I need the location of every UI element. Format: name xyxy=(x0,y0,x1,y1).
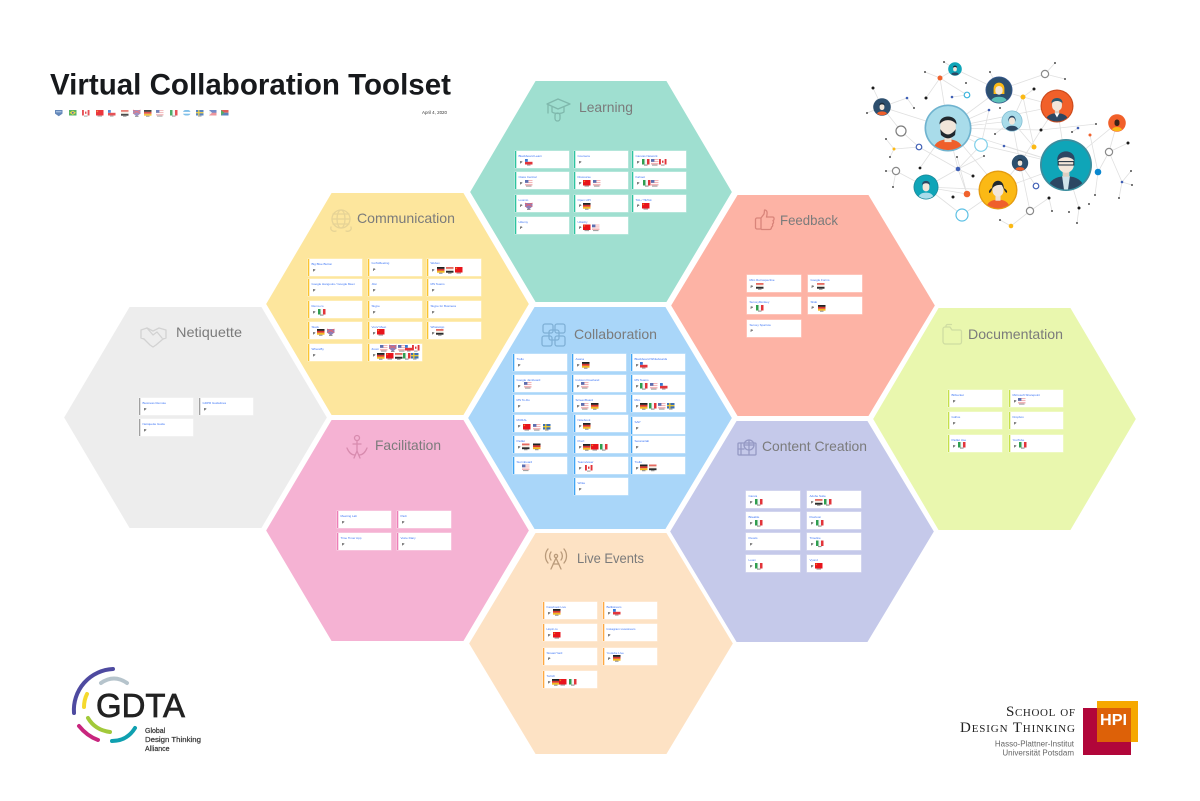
card: P xyxy=(548,634,551,638)
avatar: man with glasses xyxy=(1040,139,1092,191)
card: P xyxy=(373,332,376,336)
card: Slido xyxy=(810,300,818,304)
card: TAL / TikTok xyxy=(636,198,652,202)
card: Business Remote xyxy=(142,401,166,405)
card: P xyxy=(750,564,753,568)
card: P xyxy=(313,268,316,272)
card xyxy=(368,259,422,276)
card: P xyxy=(313,310,316,314)
card xyxy=(603,624,657,641)
logo squares xyxy=(1083,701,1138,755)
card: Notebook xyxy=(578,418,591,422)
heading: Learning xyxy=(579,99,633,115)
institute name xyxy=(995,740,1075,758)
card: Canvas Network xyxy=(636,154,658,158)
card xyxy=(427,279,481,296)
card: P xyxy=(636,466,639,470)
card: P xyxy=(342,520,345,524)
panel: learning xyxy=(469,80,733,303)
card: P xyxy=(636,426,639,430)
card: P xyxy=(204,408,207,412)
card xyxy=(808,297,862,314)
card: Hopin.to xyxy=(546,627,558,631)
card: Gdrive xyxy=(952,415,961,419)
card xyxy=(427,322,481,339)
card: P xyxy=(953,444,956,448)
card: P xyxy=(373,268,376,272)
card: P xyxy=(402,520,405,524)
card: Microsoft Sharepoint xyxy=(1012,393,1040,397)
panel: collaboration xyxy=(467,306,733,530)
icon: globe with people xyxy=(331,210,351,231)
card xyxy=(308,259,362,276)
card xyxy=(337,511,391,528)
card: SAP xyxy=(634,420,641,424)
card: P xyxy=(579,466,582,470)
panel: facilitation xyxy=(265,419,530,642)
logo wordmark: GDTA xyxy=(96,687,185,724)
card: P xyxy=(608,612,611,616)
icon: folder xyxy=(943,324,962,344)
card: P xyxy=(548,657,551,661)
card xyxy=(631,436,685,453)
card: Survey Sparrow xyxy=(750,323,772,327)
icon: graduation cap xyxy=(547,99,570,121)
card: Time Timer App xyxy=(340,536,362,540)
card xyxy=(513,436,567,453)
card xyxy=(631,417,685,434)
card: P xyxy=(812,306,814,310)
card: Skype xyxy=(372,304,380,308)
logo subtitle: Design Thinking xyxy=(145,737,201,744)
card xyxy=(368,344,422,361)
card: Skype for Business xyxy=(430,304,457,308)
card xyxy=(747,297,801,314)
card: Loom xyxy=(748,558,757,562)
card: P xyxy=(144,408,147,412)
card xyxy=(632,172,686,189)
card: Miro Retrospective xyxy=(750,278,775,282)
card xyxy=(807,491,861,508)
card: Facebook Live xyxy=(546,605,566,609)
card xyxy=(543,671,597,688)
card: Padi xyxy=(400,514,407,518)
card: P xyxy=(637,182,640,186)
card: Meeting Lab xyxy=(340,514,357,518)
card: P xyxy=(313,288,316,292)
card: Bellistream xyxy=(606,605,622,609)
network lines xyxy=(867,62,1132,226)
card xyxy=(368,322,422,339)
card xyxy=(632,195,686,212)
card xyxy=(948,390,1002,407)
card: P xyxy=(520,204,523,208)
card: P xyxy=(637,160,640,164)
card: Blackboard Whiteboards xyxy=(634,357,668,361)
card: P xyxy=(432,268,435,272)
card: P xyxy=(636,364,639,368)
card: Big Blue Button xyxy=(312,262,333,266)
card: P xyxy=(579,488,582,492)
avatar: man orange xyxy=(1040,90,1074,122)
card xyxy=(574,415,628,432)
card: P xyxy=(1014,422,1017,426)
card xyxy=(572,354,626,371)
avatar: bearded man xyxy=(924,104,972,152)
icon: thumbs up xyxy=(756,210,774,230)
card: P xyxy=(577,384,580,388)
card xyxy=(513,354,567,371)
icon: facilitator xyxy=(347,436,367,458)
card xyxy=(572,395,626,412)
logo subtitle: Alliance xyxy=(145,746,170,753)
card: P xyxy=(520,160,523,164)
card: Canva xyxy=(748,494,758,498)
card: Google Hangouts / Google Meet xyxy=(312,282,355,286)
card: P xyxy=(750,306,754,310)
card: Google Forms xyxy=(810,278,830,282)
card xyxy=(513,415,567,432)
card xyxy=(574,172,628,189)
card xyxy=(574,478,628,495)
card xyxy=(948,412,1002,429)
card: Pexels xyxy=(748,536,758,540)
card: Coursera xyxy=(578,154,590,158)
panel: communication xyxy=(265,192,530,416)
heading: Live Events xyxy=(577,550,644,566)
heading: Netiquette xyxy=(176,324,242,340)
card xyxy=(807,533,861,550)
card: P xyxy=(518,424,521,428)
card: Discourse xyxy=(578,175,591,179)
card: Voice Diary xyxy=(400,536,416,540)
card xyxy=(515,217,569,234)
card xyxy=(337,533,391,550)
card: MS Teams xyxy=(634,378,649,382)
card: Twitch xyxy=(546,674,555,678)
logo: HPI School of Design Thinking xyxy=(960,701,1138,758)
card xyxy=(574,457,628,474)
card: P xyxy=(518,404,521,408)
card xyxy=(747,320,801,337)
card: P xyxy=(750,522,753,526)
card: Udacity xyxy=(578,220,588,224)
card: P xyxy=(750,285,754,289)
card: P xyxy=(577,404,580,408)
card xyxy=(574,195,628,212)
card: P xyxy=(811,564,814,568)
date: April 4, 2020 xyxy=(422,110,447,115)
card xyxy=(631,354,685,371)
card: P xyxy=(520,226,523,230)
card: P xyxy=(811,500,814,504)
avatar: right orange xyxy=(1108,114,1126,132)
card: P xyxy=(313,354,316,358)
card xyxy=(397,511,451,528)
title: Virtual Collaboration Toolset xyxy=(50,68,451,102)
card: Timeline xyxy=(810,536,821,540)
card: P xyxy=(313,332,316,336)
card xyxy=(308,322,362,339)
card: Instagram Livestream xyxy=(606,627,636,631)
card: Miro xyxy=(634,398,641,402)
card: P xyxy=(1014,444,1017,448)
card xyxy=(427,259,481,276)
card xyxy=(368,301,422,318)
card xyxy=(746,512,800,529)
card: Blackboard Learn xyxy=(518,154,542,158)
card: GDPR Guidelines xyxy=(202,401,227,405)
card: Trello xyxy=(516,357,524,361)
card: P xyxy=(579,226,582,230)
card xyxy=(808,275,862,292)
card xyxy=(368,279,422,296)
card: P xyxy=(579,160,582,164)
card: Google Jamboard xyxy=(516,378,541,382)
card: Powtoon xyxy=(810,515,822,519)
card: P xyxy=(579,204,582,208)
icon: joined hands xyxy=(542,324,565,346)
school name xyxy=(960,704,1075,736)
card xyxy=(631,375,685,392)
card: P xyxy=(518,364,521,368)
card: Zoom xyxy=(372,347,380,351)
card: P xyxy=(750,542,753,546)
card: Jitsi xyxy=(372,282,377,286)
card: Wrike xyxy=(578,481,585,485)
card: Bitbucket xyxy=(952,393,964,397)
card: Udemy xyxy=(518,220,529,224)
card xyxy=(807,512,861,529)
heading: Content Creation xyxy=(762,438,867,454)
card: Invision Freehand xyxy=(576,378,600,382)
card: P xyxy=(432,332,435,336)
card: P xyxy=(518,446,521,450)
heading: Feedback xyxy=(780,212,839,228)
illustration: people network xyxy=(866,61,1133,228)
coloured nodes xyxy=(892,76,1123,228)
card: P xyxy=(953,422,956,426)
card: Dropbox xyxy=(1012,415,1024,419)
card: SurveyMonkey xyxy=(750,300,770,304)
logo: GDTA xyxy=(74,669,201,753)
card xyxy=(515,151,569,168)
card xyxy=(631,395,685,412)
card xyxy=(631,457,685,474)
institute name: Hasso-Plattner-Institut xyxy=(995,740,1075,748)
logo subtitle xyxy=(145,728,201,753)
card: P xyxy=(608,634,611,638)
avatar: left navy xyxy=(873,98,891,116)
card: P xyxy=(579,182,582,186)
avatar: man teal xyxy=(914,174,938,200)
card: P xyxy=(579,424,582,428)
card xyxy=(139,398,193,415)
card: P xyxy=(548,612,551,616)
card xyxy=(1009,435,1063,452)
card: YouTube xyxy=(1012,438,1025,442)
heading: Collaboration xyxy=(574,326,657,342)
card: Padlet Use xyxy=(952,438,967,442)
card: P xyxy=(636,384,639,388)
card: P xyxy=(577,364,580,368)
card xyxy=(948,435,1002,452)
card: P xyxy=(373,354,376,358)
card xyxy=(513,395,567,412)
card: Class Central xyxy=(518,175,537,179)
card: MS Teams xyxy=(430,282,445,286)
card: Sessionlab xyxy=(634,439,650,443)
card: P xyxy=(637,204,640,208)
card: Kahoot xyxy=(636,175,645,179)
card: P xyxy=(520,182,523,186)
heading: Communication xyxy=(357,210,455,226)
card xyxy=(397,533,451,550)
card: P xyxy=(750,500,753,504)
avatar: top teal xyxy=(948,62,962,76)
card xyxy=(513,375,567,392)
card: Biteable xyxy=(748,515,760,519)
card: P xyxy=(811,542,814,546)
card xyxy=(603,648,657,665)
heading: Facilitation xyxy=(375,437,441,453)
avatar: woman light blue xyxy=(1002,110,1022,132)
card xyxy=(746,491,800,508)
legend: country flags xyxy=(55,110,228,117)
institute name: Universität Potsdam xyxy=(1002,748,1074,758)
card: P xyxy=(518,384,521,388)
card xyxy=(632,151,686,168)
card xyxy=(574,151,628,168)
card: VooV Meet xyxy=(372,325,386,329)
card: P xyxy=(432,288,435,292)
card: Prezi xyxy=(578,439,585,443)
ring nodes xyxy=(892,70,1113,221)
card: Adobe Suite xyxy=(810,494,826,498)
card xyxy=(574,436,628,453)
panel: live events xyxy=(468,532,734,755)
card: P xyxy=(144,428,147,432)
logo arcs xyxy=(74,669,135,741)
card: Open HPI xyxy=(578,198,591,202)
card: WhatsApp xyxy=(430,325,445,329)
card: MURAL xyxy=(516,418,527,422)
panel: netiquette xyxy=(63,306,328,529)
card xyxy=(543,648,597,665)
card: P xyxy=(811,522,814,526)
card: P xyxy=(548,680,551,684)
avatar: woman navy xyxy=(986,76,1012,104)
logo squares: HPI xyxy=(1100,712,1127,729)
card: Vyond xyxy=(810,558,818,562)
card xyxy=(807,555,861,572)
logo subtitle: Global xyxy=(145,728,166,735)
card: P xyxy=(402,542,405,546)
panel: feedback xyxy=(670,194,936,417)
card: P xyxy=(953,400,956,404)
icon: broadcast antenna xyxy=(545,549,567,569)
school name: School of xyxy=(1006,704,1075,720)
card: GoToMeeting xyxy=(372,261,390,265)
school name: Design Thinking xyxy=(960,720,1075,736)
card xyxy=(515,195,569,212)
card: Teamviewer xyxy=(578,460,594,464)
avatar: woman yellow xyxy=(978,170,1018,210)
card xyxy=(572,375,626,392)
card: P xyxy=(373,310,376,314)
card: Asana xyxy=(576,357,584,361)
card: Padlet xyxy=(516,439,525,443)
card: Youtube Live xyxy=(606,651,624,655)
card: P xyxy=(373,288,376,292)
card xyxy=(308,279,362,296)
card xyxy=(1009,412,1063,429)
heading: Documentation xyxy=(968,326,1063,342)
panel: documentation xyxy=(872,307,1137,531)
avatar: center navy xyxy=(1012,155,1028,171)
card: ScreenBoard xyxy=(576,398,593,402)
card: P xyxy=(1014,400,1017,404)
card: P xyxy=(579,446,582,450)
card: WhereBy xyxy=(312,347,324,351)
black nodes xyxy=(866,61,1133,224)
card xyxy=(574,217,628,234)
card xyxy=(746,533,800,550)
card xyxy=(515,172,569,189)
card xyxy=(513,457,567,474)
card: P xyxy=(812,285,814,289)
card xyxy=(427,301,481,318)
card xyxy=(308,301,362,318)
card: Remo.co xyxy=(312,304,324,308)
card: Loomio xyxy=(518,198,529,202)
card: MS To-Do xyxy=(516,398,530,402)
card xyxy=(308,344,362,361)
card: P xyxy=(342,542,345,546)
card: Webex xyxy=(430,261,440,265)
card: P xyxy=(636,446,639,450)
icon: handshake xyxy=(141,328,166,347)
card xyxy=(1009,390,1063,407)
card xyxy=(746,555,800,572)
panel: content creation xyxy=(669,420,935,643)
card xyxy=(603,602,657,619)
card: StreamYard xyxy=(546,651,563,655)
icon: content tools xyxy=(738,440,756,455)
card xyxy=(543,602,597,619)
card: Slack xyxy=(312,325,319,329)
card: Stormboard xyxy=(516,460,533,464)
card: P xyxy=(432,310,435,314)
card xyxy=(543,624,597,641)
card: Netiquette Guide xyxy=(142,422,165,426)
card: Trello xyxy=(634,460,642,464)
card: P xyxy=(750,329,754,333)
card: P xyxy=(636,404,639,408)
card xyxy=(199,398,253,415)
card xyxy=(747,275,801,292)
card xyxy=(139,419,193,436)
card: P xyxy=(608,657,611,661)
